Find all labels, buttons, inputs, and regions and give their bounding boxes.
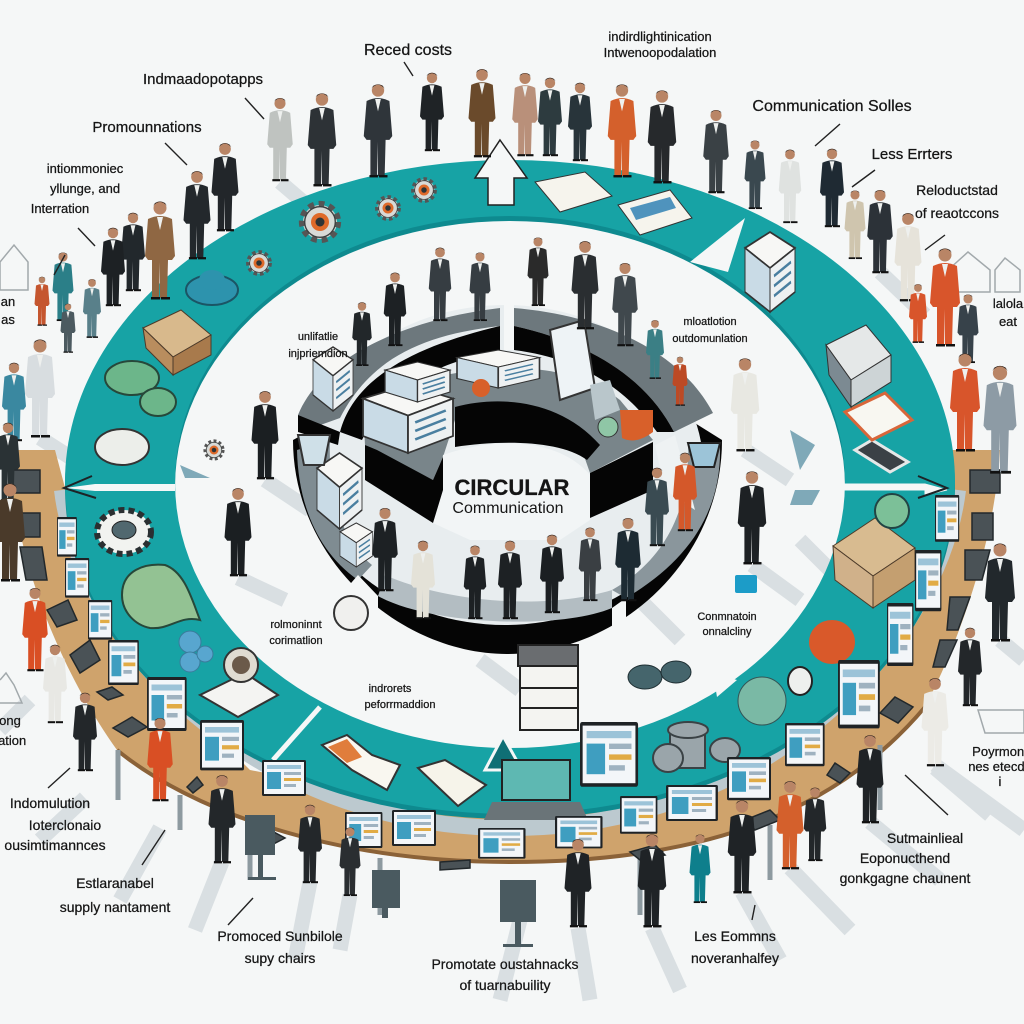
callout labels: mloatlotion (683, 316, 737, 328)
icon: large monitor (580, 722, 638, 787)
callout labels: Estlaranabel (76, 875, 154, 891)
icon: white gear left (97, 510, 151, 554)
central black spiral platform (293, 300, 722, 654)
front grey floor band (378, 575, 612, 622)
arrow head right (918, 476, 947, 498)
arrow: bottom (485, 736, 522, 770)
inner icons (180, 320, 820, 730)
icon: green leaf bubble (122, 565, 200, 628)
white gaps between segments (340, 300, 626, 650)
icon: coin stacks (653, 722, 740, 772)
callout labels: indrorets (369, 683, 412, 695)
callout labels: corimatlion (269, 635, 323, 647)
callout labels: Promoced Sunbilole (217, 928, 343, 944)
desk legs (118, 745, 880, 915)
callout labels: Ioterclonaio (29, 817, 101, 833)
icon: documents (745, 232, 795, 312)
icon: green badge (598, 417, 618, 437)
people: inner circle (224, 237, 766, 619)
icon: speech bubbles (105, 361, 176, 416)
icon: printer (826, 325, 891, 407)
callout labels: Less Errters (872, 146, 952, 163)
icon: orange bucket (620, 410, 653, 440)
central title: Communication (452, 500, 564, 517)
callout labels: Intwenoopodalation (604, 45, 716, 60)
icon: orange gear (414, 180, 434, 200)
icon: boxes (833, 518, 915, 608)
inner black block right (590, 442, 653, 518)
icon: clutter (590, 380, 620, 420)
icon: webcam (200, 648, 278, 717)
callout labels: ousimtimannces (4, 837, 106, 853)
floor surface (307, 305, 703, 625)
callout labels: noveranhalfey (691, 950, 779, 966)
callout labels: of reaotccons (915, 205, 999, 221)
inner grey tier (363, 368, 653, 480)
callout labels: Interration (31, 201, 89, 216)
callout labels: intiommoniec (47, 161, 124, 176)
arrow: lower left line (273, 707, 320, 760)
callout labels: peforrmaddion (365, 699, 435, 711)
callout labels: i (999, 774, 1002, 789)
central title: CIRCULAR (455, 475, 570, 500)
icon: tablet (855, 440, 908, 472)
callout labels: lalola (993, 296, 1024, 311)
callout labels: injpriemdion (288, 348, 348, 360)
icon: box bottom (340, 523, 372, 567)
icon: rings (628, 661, 691, 689)
icon: small teal square (735, 575, 757, 593)
right grey floor band (612, 445, 720, 598)
callout labels: Promounnations (92, 119, 202, 136)
icon: open book 2 (418, 760, 486, 806)
arrow: top (475, 140, 527, 205)
icon: paper stack (518, 645, 578, 730)
icon: white tower (317, 453, 362, 529)
callout labels: onnalcliny (703, 626, 752, 638)
icon: document block left (313, 347, 353, 411)
black outer base (293, 420, 722, 654)
desk: curved wooden workstation (8, 450, 1000, 915)
icon: laptop (484, 760, 588, 820)
ring icons (95, 172, 915, 820)
callout labels: Les Eommns (694, 928, 776, 944)
callout labels: of tuarnabuility (459, 977, 551, 993)
icon: tub left (298, 435, 330, 465)
office chairs (245, 815, 536, 947)
icon: report (550, 320, 595, 400)
centre light area (433, 443, 590, 540)
callout labels: Sutmainlieal (887, 830, 963, 846)
icon: papers (845, 393, 912, 440)
teal circular ring with arrows (64, 140, 955, 819)
inner black wall back (455, 401, 600, 460)
icon: globe (738, 677, 786, 725)
callout labels: unlifatlie (298, 331, 338, 343)
monitor backing panel (62, 490, 958, 828)
left grey floor band (297, 440, 372, 580)
icon: globe gear (249, 253, 269, 273)
icon: gears top (303, 205, 337, 239)
arrow: left (65, 484, 175, 491)
small teal marks (180, 430, 820, 505)
icon: orange plant (809, 620, 855, 664)
callout labels: Reced costs (364, 42, 452, 59)
callout labels: Indomulution (10, 795, 90, 811)
leader arrows (48, 62, 948, 925)
icon: green badge (875, 494, 909, 528)
arrow: right (843, 484, 947, 495)
callout labels: supy chairs (245, 950, 315, 966)
monitors along desk (57, 495, 959, 859)
arrow head left (64, 476, 96, 498)
icon: tub (688, 443, 720, 467)
callout labels: Eoponucthend (860, 850, 950, 866)
callout labels: supply nantament (60, 899, 170, 915)
keyboards and screens on desk (12, 470, 1000, 870)
icon: box (143, 310, 211, 375)
callout labels: Conmnatoin (697, 611, 757, 623)
black walls top (298, 326, 674, 445)
callout labels: outdomunlation (672, 333, 748, 345)
callout labels: Indmaadopotapps (143, 71, 263, 88)
icon: orange gear (205, 441, 223, 459)
outline icons at page edges (0, 245, 1024, 733)
central title (452, 475, 570, 517)
callout labels: Promotate oustahnacks (431, 956, 579, 972)
icon: bubble (95, 429, 149, 465)
callout labels: gonkgagne chaunent (840, 870, 970, 886)
callout labels: Communication Solles (752, 98, 912, 115)
icon: document stack upper (385, 362, 450, 402)
callout labels: rolmoninnt (270, 619, 322, 631)
callout labels: indirdlightinication (608, 29, 712, 44)
icon: cloud (186, 270, 238, 305)
icon: roll (334, 596, 368, 630)
icon: open book (322, 735, 400, 790)
callout labels: eat (999, 314, 1017, 329)
icon: blue balls (179, 631, 213, 672)
outer top right grey surface (514, 308, 713, 432)
callout labels: yllunge, and (50, 181, 120, 196)
callout labels: Reloductstad (916, 182, 998, 198)
callout labels: as (1, 312, 15, 327)
icon: small gear (378, 198, 398, 218)
callout labels: an (1, 294, 15, 309)
arrow: upper right (690, 218, 745, 272)
icon: documents centre (457, 350, 540, 388)
inner black block left (365, 445, 443, 523)
outer top left grey surface (298, 308, 500, 428)
icon: small badge (788, 667, 812, 695)
icon: newspapers (535, 172, 692, 235)
icon: document stack (363, 385, 453, 453)
icon: orange splash (472, 379, 490, 397)
gap right (655, 435, 695, 510)
arrow: lower right notch (713, 673, 737, 697)
